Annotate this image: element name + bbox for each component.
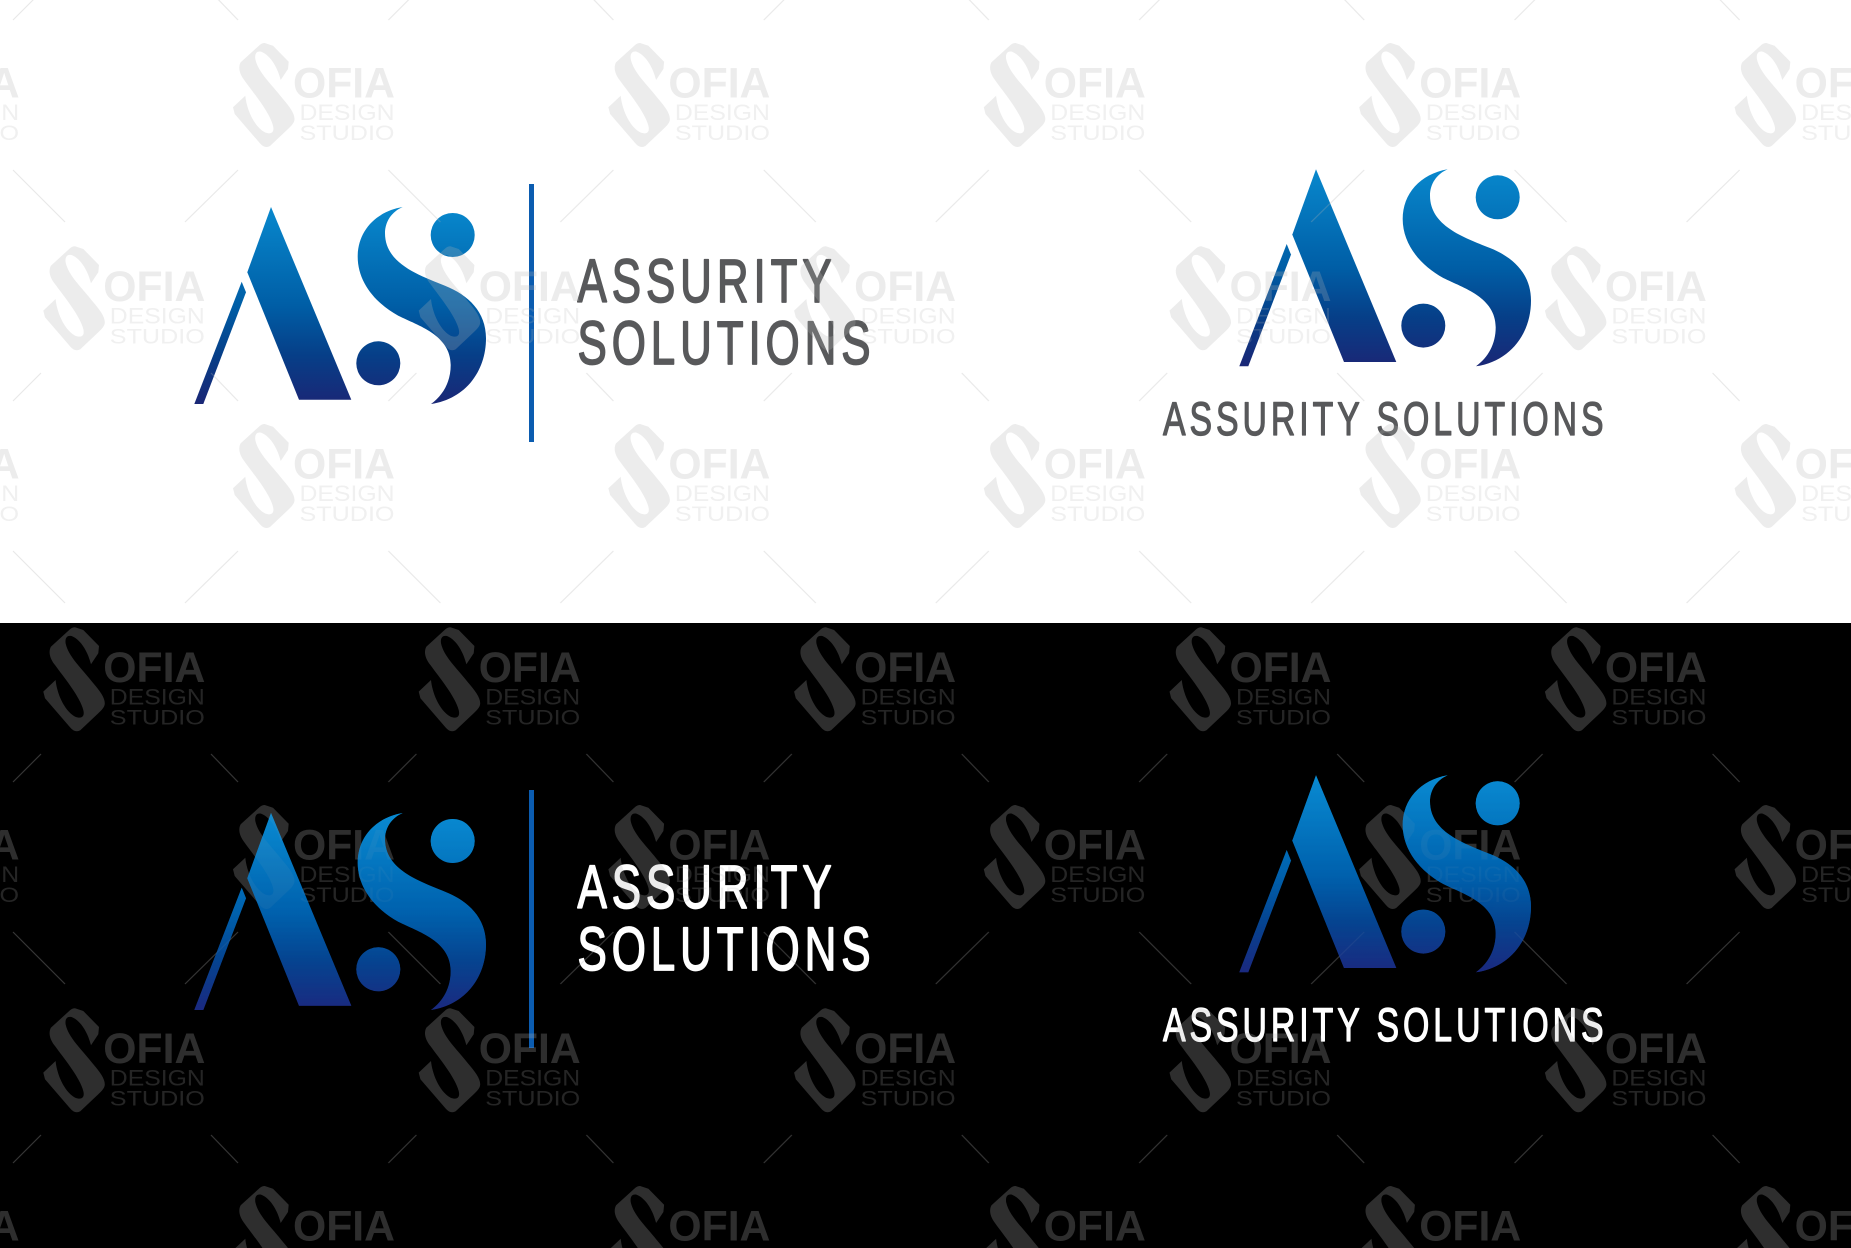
watermark tile <box>984 424 1146 528</box>
watermark tile: OFIA <box>1044 822 1146 870</box>
watermark tile <box>419 627 581 731</box>
watermark tile: STUDIO <box>675 883 770 907</box>
watermark tile: STUDIO <box>1236 1086 1331 1110</box>
logo: horizontal lockup on white <box>194 184 871 442</box>
wordmark: Assurity Solutions <box>578 248 871 378</box>
watermark tile: OFIA <box>1605 644 1707 692</box>
watermark tile: DESIGN <box>861 684 956 709</box>
watermark tile <box>1735 424 1851 528</box>
watermark tile: OFIA <box>293 440 395 488</box>
logo: horizontal lockup on black <box>194 790 871 1048</box>
watermark tile: OFIA <box>103 644 205 692</box>
watermark tile <box>608 424 770 528</box>
watermark tile: DESIGN <box>1236 684 1331 709</box>
watermark tile: DESIGN <box>861 1065 956 1090</box>
watermark tile: DESIGN <box>300 100 394 125</box>
wordmark: Assurity Solutions: ASSURITY <box>578 854 832 922</box>
watermark tile: DESIGN <box>675 481 770 506</box>
watermark tile <box>233 1186 395 1248</box>
watermark tile: STUDIO <box>485 705 580 729</box>
watermark tile: STUDIO <box>110 324 205 348</box>
watermark tile: OFIA <box>854 1025 956 1073</box>
watermark tile: OFIA <box>293 822 395 870</box>
watermark tile <box>608 1186 770 1248</box>
watermark tile: DESIGN <box>300 862 394 887</box>
icon: AS monogram <box>1239 169 1531 366</box>
watermark tile: DESIGN <box>485 684 580 709</box>
watermark tile: DESIGN <box>861 303 956 328</box>
watermark tile: DESIGN <box>1050 862 1145 887</box>
watermark tile: STUDIO <box>1050 121 1145 145</box>
watermark tile: STUDIO <box>1426 883 1521 907</box>
watermark tile: OFIA <box>103 1025 205 1073</box>
icon: monogram tone restore, horizontal lockup on black <box>194 813 486 1010</box>
watermark tile: OFIA <box>668 822 770 870</box>
watermark tile <box>1359 1186 1521 1248</box>
watermark tile <box>794 1008 956 1112</box>
watermark tile <box>1545 627 1707 731</box>
watermark tile: OFIA <box>1230 263 1332 311</box>
watermark tile: STUDIO <box>1426 502 1521 526</box>
watermark tile: DESIGN <box>110 1065 205 1090</box>
watermark tile: STUDIO <box>675 121 770 145</box>
watermark tile <box>1170 246 1332 350</box>
watermark tile: OFIA <box>854 263 956 311</box>
watermark tile: DESIGN <box>1426 862 1521 887</box>
watermark tile <box>984 1186 1146 1248</box>
watermark tile: STUDIO <box>1611 324 1706 348</box>
logo: stacked lockup on black <box>1163 775 1604 1051</box>
wordmark: Assurity Solutions: SOLUTIONS <box>578 310 871 378</box>
watermark tile: STUDIO <box>485 1086 580 1110</box>
watermark tile <box>419 1008 581 1112</box>
watermark tile: OFIA <box>668 440 770 488</box>
watermark tile <box>1545 246 1707 350</box>
watermark tile: STUDIO <box>1611 1086 1706 1110</box>
watermark tile: STUDIO <box>861 324 956 348</box>
watermark tile <box>43 627 205 731</box>
watermark tile: STUDIO <box>1611 705 1706 729</box>
watermark tile: STUDIO <box>1236 324 1331 348</box>
wordmark: Assurity Solutions <box>578 854 871 984</box>
watermark tile: STUDIO <box>675 502 770 526</box>
watermark tile: STUDIO <box>485 324 580 348</box>
wordmark: Assurity Solutions: ASSURITY <box>578 248 832 316</box>
watermark tile: DESIGN <box>1611 684 1706 709</box>
watermark tile: STUDIO <box>1050 883 1145 907</box>
icon: AS monogram <box>194 207 486 404</box>
watermark tile <box>608 805 770 909</box>
watermark tile <box>1735 805 1851 909</box>
watermark tile <box>1359 805 1521 909</box>
watermark tile: OFIA <box>479 1025 581 1073</box>
watermark tile: STUDIO <box>300 121 394 145</box>
watermark tile: DESIGN <box>1050 100 1145 125</box>
divider bar <box>529 790 534 1048</box>
watermark tile: DESIGN <box>485 303 580 328</box>
wordmark: Assurity Solutions: ASSURITY SOLUTIONS <box>1163 393 1604 445</box>
watermark tile <box>794 627 956 731</box>
watermark tile <box>984 43 1146 147</box>
watermark tile: OFIA <box>103 263 205 311</box>
watermark tile: DESIGN <box>110 303 205 328</box>
watermark tile <box>1735 1186 1851 1248</box>
watermark tile: OFIA <box>1605 1025 1707 1073</box>
watermark tile: OFIA <box>293 60 395 108</box>
watermark tile: DESIGN <box>300 481 394 506</box>
watermark tile: STUDIO <box>861 1086 956 1110</box>
watermark tile: DESIGN <box>675 100 770 125</box>
watermark tile: OFIA <box>1419 440 1521 488</box>
watermark tile: OFIA <box>854 644 956 692</box>
watermark tile: STUDIO <box>861 705 956 729</box>
logo: stacked lockup on white <box>1163 169 1604 445</box>
watermark tile: OFIA <box>668 60 770 108</box>
watermark tile: STUDIO <box>110 1086 205 1110</box>
watermark tile: OFIA <box>1230 644 1332 692</box>
watermark tile <box>1359 43 1521 147</box>
watermark tile <box>0 805 20 909</box>
watermark tile: DESIGN <box>1426 481 1521 506</box>
watermark tile: DESIGN <box>675 862 770 887</box>
watermark tile <box>419 246 581 350</box>
watermark tile <box>43 1008 205 1112</box>
watermark tile <box>0 43 20 147</box>
watermark tile: DESIGN <box>110 684 205 709</box>
watermark tile <box>43 246 205 350</box>
watermark tile: OFIA <box>479 644 581 692</box>
wordmark: Assurity Solutions: ASSURITY SOLUTIONS <box>1163 999 1604 1051</box>
watermark tile: STUDIO <box>110 705 205 729</box>
watermark tile <box>1545 1008 1707 1112</box>
watermark tile <box>233 805 395 909</box>
watermark tile <box>0 424 20 528</box>
icon: AS monogram <box>1239 775 1531 972</box>
watermark tile: DESIGN <box>1611 303 1706 328</box>
watermark tile <box>984 805 1146 909</box>
watermark tile <box>794 246 956 350</box>
watermark tile: OFIA <box>1044 60 1146 108</box>
watermark tile: STUDIO <box>1236 705 1331 729</box>
icon: AS monogram <box>194 813 486 1010</box>
watermark tile <box>233 43 395 147</box>
watermark tile: OFIA <box>1605 263 1707 311</box>
icon: monogram tone restore, stacked lockup on black <box>1239 775 1531 972</box>
watermark tile: STUDIO <box>1050 502 1145 526</box>
watermark tile: DESIGN <box>1050 481 1145 506</box>
watermark tile: OFIA <box>1044 440 1146 488</box>
watermark tile: DESIGN <box>1236 1065 1331 1090</box>
watermark tile <box>233 424 395 528</box>
watermark tile: OFIA <box>479 263 581 311</box>
watermark tile <box>1170 1008 1332 1112</box>
watermark tile: DESIGN <box>1426 100 1521 125</box>
watermark tile: STUDIO <box>300 883 394 907</box>
watermark tile: DESIGN <box>1236 303 1331 328</box>
divider bar <box>529 184 534 442</box>
watermark tile: STUDIO <box>300 502 394 526</box>
watermark tile <box>1735 43 1851 147</box>
panel: white background <box>0 0 1851 623</box>
watermark tile: DESIGN <box>1611 1065 1706 1090</box>
watermark tile: STUDIO <box>1426 121 1521 145</box>
watermark tile: OFIA <box>1419 822 1521 870</box>
panel: black background <box>0 623 1851 1248</box>
watermark tile: OFIA <box>1419 60 1521 108</box>
watermark tile: DESIGN <box>485 1065 580 1090</box>
wordmark: Assurity Solutions: SOLUTIONS <box>578 916 871 984</box>
watermark tile <box>1359 424 1521 528</box>
watermark tile <box>1170 627 1332 731</box>
watermark tile: OFIA <box>1230 1025 1332 1073</box>
watermark tile <box>608 43 770 147</box>
